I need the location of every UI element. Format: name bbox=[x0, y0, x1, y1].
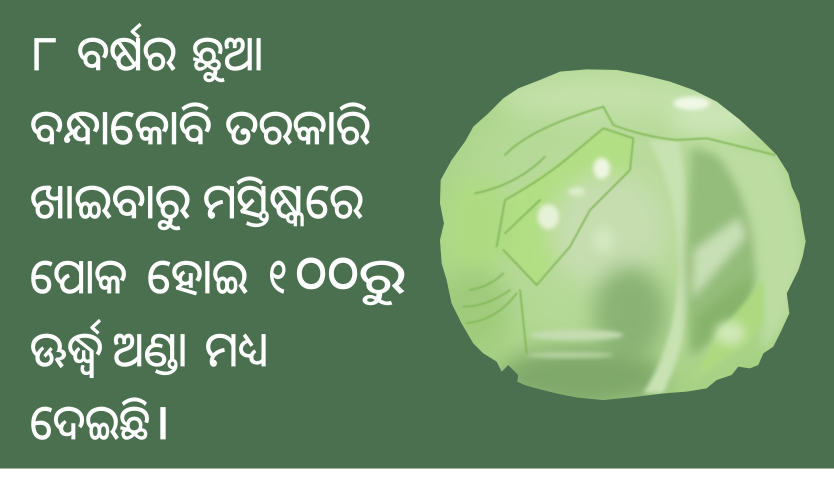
headline text: । bbox=[156, 397, 170, 450]
headline text: ୮ bbox=[30, 28, 57, 81]
headline text: ଅଣ୍ଡା bbox=[113, 324, 187, 377]
headline text: ରୁ bbox=[359, 251, 405, 305]
headline text: ଖାଇବାରୁ bbox=[30, 176, 190, 230]
headline text: ମଧ୍ୟ bbox=[205, 324, 268, 377]
headline text: ଦେଇଛି bbox=[30, 397, 150, 450]
headline text: ବର୍ଷର bbox=[77, 23, 176, 81]
headline text: ହୋଇ bbox=[147, 251, 248, 304]
headline text: ତରକାରି bbox=[225, 102, 370, 155]
cabbage leaf creases bbox=[463, 107, 775, 353]
headline text: ବନ୍ଧାକୋବି bbox=[30, 102, 212, 155]
headline text: ୦ bbox=[328, 238, 358, 307]
icon: cabbage bbox=[437, 69, 806, 407]
headline text bbox=[30, 23, 405, 450]
headline text: ପୋକ bbox=[30, 251, 127, 304]
headline text: ୧ bbox=[268, 251, 287, 304]
headline text: ଊର୍ଦ୍ଧ୍ୱ bbox=[30, 319, 103, 378]
headline text: ଛୁଆ bbox=[192, 28, 263, 82]
headline text: ମସ୍ତିଷ୍କରେ bbox=[203, 176, 363, 229]
headline text: ୦ bbox=[296, 238, 326, 307]
